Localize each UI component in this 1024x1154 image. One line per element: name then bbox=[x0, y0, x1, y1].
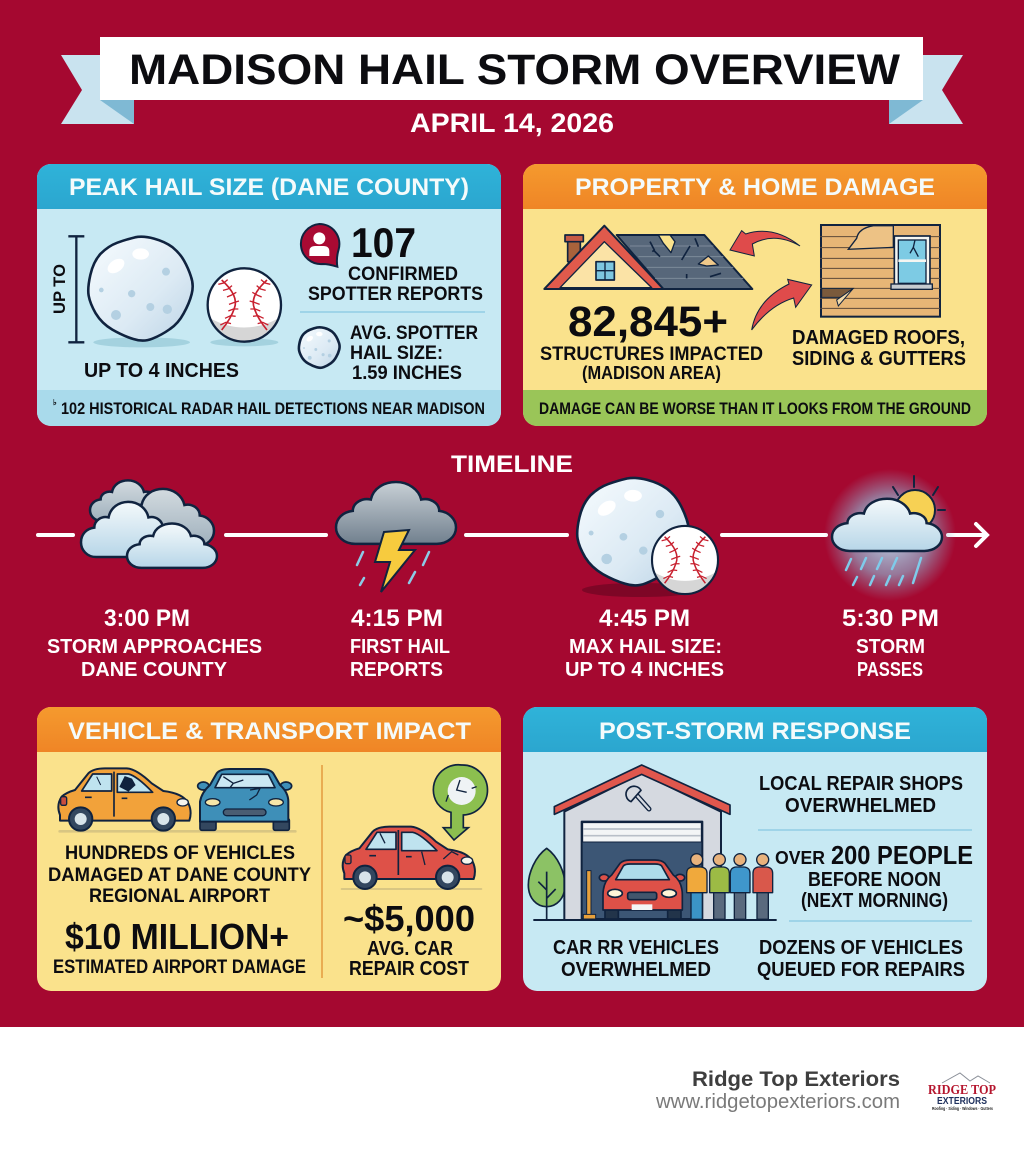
company logo: RIDGE TOP bbox=[928, 1083, 996, 1098]
text: vehicles damaged: REGIONAL AIRPORT bbox=[89, 885, 270, 907]
tree bbox=[528, 848, 565, 920]
stat: repair cost bbox=[343, 898, 475, 980]
text: local repair shops bbox=[759, 773, 963, 817]
caption: damaged roofs: SIDING & GUTTERS bbox=[792, 348, 966, 370]
title ribbon bbox=[61, 37, 963, 124]
arrow: to roof bbox=[730, 231, 800, 256]
label: 4:15 PM bbox=[351, 605, 443, 632]
icon: red car bbox=[341, 827, 482, 890]
stat: repair cost: REPAIR COST bbox=[349, 958, 469, 980]
panel: post-storm response bbox=[523, 707, 987, 991]
stat: spotter reports: CONFIRMED bbox=[348, 263, 458, 285]
label: DANE COUNTY bbox=[81, 659, 228, 681]
label bbox=[842, 605, 939, 681]
stat: spotter reports: SPOTTER REPORTS bbox=[308, 283, 483, 305]
stat: average hail size: 1.59 INCHES bbox=[352, 362, 462, 384]
stat: average hail size: HAIL SIZE: bbox=[350, 342, 443, 364]
icon: spotter bubble bbox=[301, 224, 339, 267]
hail and baseball illustration bbox=[68, 236, 281, 347]
label: FIRST HAIL bbox=[350, 636, 450, 658]
company name and website: Ridge Top Exteriors bbox=[692, 1067, 900, 1091]
company name and website bbox=[655, 1067, 900, 1113]
text: car repair vehicles: CAR RR VEHICLES bbox=[553, 937, 719, 959]
icon: clearing sky bbox=[824, 469, 956, 601]
text: vehicles damaged: HUNDREDS OF VEHICLES bbox=[65, 842, 295, 864]
icon: small hailstone bbox=[299, 327, 340, 368]
label: STORM bbox=[856, 636, 925, 658]
icon: storm cloud bbox=[336, 482, 456, 592]
stat: repair cost: ~$5,000 bbox=[343, 898, 475, 939]
label bbox=[565, 605, 724, 681]
timeline line and arrow bbox=[38, 524, 987, 546]
text: vehicles damaged bbox=[48, 842, 311, 907]
timeline step: 5:30 PM bbox=[824, 469, 956, 681]
panel: property and home damage bbox=[523, 164, 987, 426]
footnote: 102 HISTORICAL RADAR HAIL DETECTIONS NEAR MADISON bbox=[61, 399, 485, 418]
company logo: Roofing · Siding · Windows · Gutters bbox=[932, 1106, 993, 1111]
stat: average hail size bbox=[350, 322, 478, 384]
up to label: UP TO bbox=[50, 264, 69, 314]
label: REPORTS bbox=[350, 659, 443, 681]
icon: damaged cars bbox=[58, 768, 297, 833]
date: APRIL 14, 2026 bbox=[410, 108, 614, 138]
stat: spotter reports: 107 bbox=[351, 219, 416, 266]
stat: structures impacted bbox=[540, 298, 763, 383]
heading: VEHICLE & TRANSPORT IMPACT bbox=[68, 718, 471, 745]
hail size caption: UP TO 4 INCHES bbox=[84, 360, 239, 382]
heading: PROPERTY & HOME DAMAGE bbox=[575, 174, 935, 201]
stat: average hail size: AVG. SPOTTER bbox=[350, 322, 478, 344]
stat: airport damage: $10 MILLION+ bbox=[65, 916, 289, 957]
stat: structures impacted: 82,845+ bbox=[568, 298, 728, 346]
label: MAX HAIL SIZE: bbox=[569, 636, 722, 658]
heading: PEAK HAIL SIZE (DANE COUNTY) bbox=[69, 174, 469, 201]
label: STORM APPROACHES bbox=[47, 636, 262, 658]
stat: airport damage bbox=[53, 916, 306, 978]
people queue bbox=[687, 854, 773, 919]
stat: over 200 people: (NEXT MORNING) bbox=[801, 890, 948, 912]
heading: POST-STORM RESPONSE bbox=[599, 718, 911, 745]
stat: spotter reports bbox=[308, 219, 483, 305]
label bbox=[350, 605, 450, 681]
stat: over 200 people: OVER bbox=[775, 848, 825, 868]
panel: vehicle and transport impact bbox=[37, 707, 501, 991]
icon: repair pin bbox=[433, 765, 488, 840]
text: dozens queued bbox=[757, 937, 965, 981]
post bbox=[583, 871, 596, 919]
stat: repair cost: AVG. CAR bbox=[367, 938, 453, 960]
caption: damaged roofs: DAMAGED ROOFS, bbox=[792, 327, 965, 349]
text: dozens queued: DOZENS OF VEHICLES bbox=[759, 937, 963, 959]
stat: over 200 people: BEFORE NOON bbox=[808, 869, 941, 891]
car bbox=[599, 860, 685, 919]
building bbox=[554, 765, 730, 920]
company name and website: www.ridgetopexteriors.com bbox=[655, 1091, 900, 1113]
stat: over 200 people bbox=[775, 840, 973, 912]
icon: hailstone and baseball bbox=[577, 478, 718, 597]
label: 4:45 PM bbox=[599, 605, 690, 632]
title ribbon: MADISON HAIL STORM OVERVIEW bbox=[129, 46, 900, 94]
stat: airport damage: ESTIMATED AIRPORT DAMAGE bbox=[53, 956, 306, 978]
footnote: ♭ bbox=[53, 398, 57, 407]
label: 3:00 PM bbox=[104, 605, 190, 632]
text: vehicles damaged: DAMAGED AT DANE COUNTY bbox=[48, 864, 311, 886]
text: local repair shops: OVERWHELMED bbox=[785, 795, 936, 817]
stat: over 200 people: 200 PEOPLE bbox=[831, 840, 973, 870]
icon: repair garage and queue bbox=[528, 765, 777, 920]
text: car repair vehicles: OVERWHELMED bbox=[561, 959, 711, 981]
text: dozens queued: QUEUED FOR REPAIRS bbox=[757, 959, 965, 981]
company logo: EXTERIORS bbox=[937, 1096, 987, 1107]
stat: structures impacted: (MADISON AREA) bbox=[582, 363, 721, 383]
label: UP TO 4 INCHES bbox=[565, 659, 724, 681]
company logo bbox=[928, 1073, 996, 1111]
label: 5:30 PM bbox=[842, 605, 939, 632]
icon: damaged siding bbox=[820, 225, 940, 317]
text: local repair shops: LOCAL REPAIR SHOPS bbox=[759, 773, 963, 795]
timeline step: 4:45 PM bbox=[565, 478, 724, 681]
text: car repair vehicles bbox=[553, 937, 719, 981]
timeline step: 4:15 PM bbox=[336, 482, 456, 681]
icon: damaged roof bbox=[544, 226, 752, 289]
timeline step: 3:00 PM bbox=[47, 480, 262, 681]
panel: peak hail size bbox=[37, 164, 501, 426]
caption: damaged roofs bbox=[792, 327, 966, 370]
label bbox=[47, 605, 262, 681]
icon: clouds bbox=[81, 480, 217, 568]
stat: structures impacted: STRUCTURES IMPACTED bbox=[540, 343, 763, 365]
label: PASSES bbox=[857, 659, 923, 681]
timeline heading: TIMELINE bbox=[451, 451, 573, 478]
arrow: to siding bbox=[752, 279, 812, 330]
